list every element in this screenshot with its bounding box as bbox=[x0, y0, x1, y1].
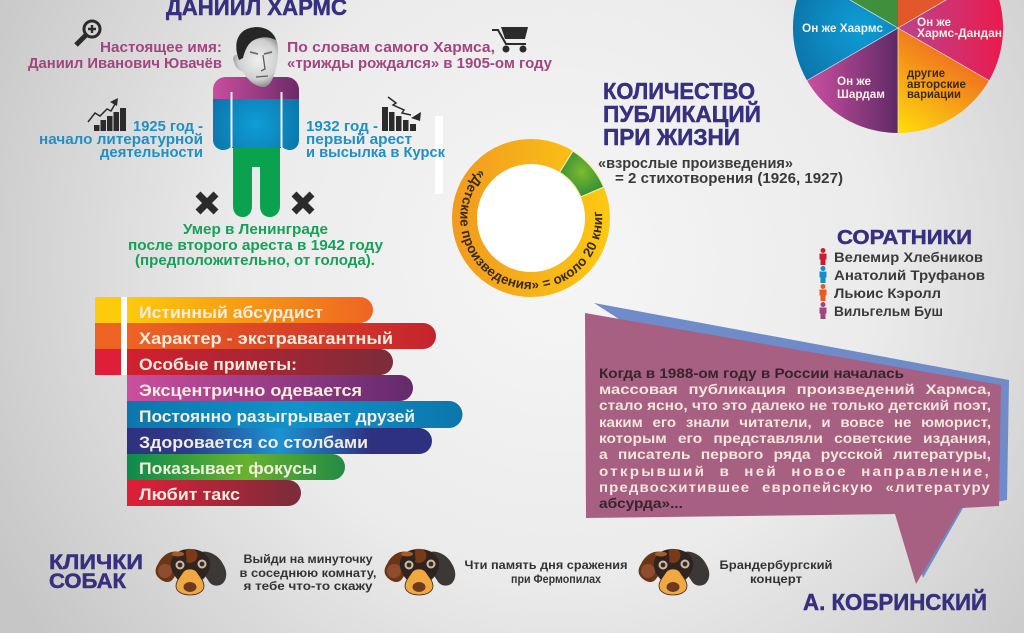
pie chart: pseudonyms bbox=[793, 0, 1003, 133]
real name text: Настоящее имя: bbox=[100, 40, 222, 56]
icon: dog 1 bbox=[156, 549, 226, 595]
dog name 3: концерт bbox=[750, 574, 802, 586]
trait bar 3: Особые приметы: bbox=[139, 356, 297, 374]
pie label: Шардам: Он же bbox=[837, 76, 871, 88]
death text: после второго ареста в 1942 году bbox=[128, 238, 383, 254]
1932 text: и высылка в Курск bbox=[306, 145, 446, 161]
trait bar 4: Эксцентрично одевается bbox=[139, 382, 362, 400]
panel: quote bubble bbox=[585, 303, 1009, 584]
pie label: Хармс-Дандан bbox=[917, 17, 1002, 40]
associate: Труфанов: Анатолий Труфанов bbox=[834, 268, 985, 283]
death text: (предположительно, от голода). bbox=[135, 253, 375, 269]
pie label: Хармс-Дандан: Он же bbox=[917, 17, 951, 29]
trait bar 1: Истинный абсурдист bbox=[139, 304, 323, 322]
pie label: Хармс-Дандан: Хармс-Дандан bbox=[917, 28, 1002, 40]
icon: dog 3 bbox=[639, 549, 709, 595]
quote text: открывший в ней новое направление, bbox=[599, 464, 991, 479]
dog name 1 bbox=[240, 554, 376, 593]
trait bar 5 bbox=[127, 401, 462, 428]
panel: associates bbox=[820, 226, 985, 319]
three births text: «трижды рождался» в 1905-ом году bbox=[287, 56, 552, 72]
quote text bbox=[599, 366, 991, 511]
trait bar 3 bbox=[127, 349, 393, 375]
1925 text: начало литературной bbox=[39, 132, 203, 148]
1925 text bbox=[39, 119, 203, 161]
quote text: а писатель первого ряда русской литературы, bbox=[599, 447, 991, 462]
pie label: Шардам bbox=[837, 76, 885, 101]
quote text: массовая публикация произведений Хармса, bbox=[599, 382, 991, 397]
dog name 3 bbox=[720, 560, 832, 586]
shoulders bbox=[213, 77, 299, 99]
pie label: variations: вариации bbox=[907, 89, 961, 101]
three births text bbox=[287, 40, 552, 72]
pie label: Хаармс: Он же Хаармс bbox=[802, 23, 884, 35]
1925 text: 1925 год - bbox=[133, 119, 203, 135]
real name text bbox=[28, 40, 222, 72]
donut chart: «Детские произведения» = около 20 книг bbox=[460, 171, 602, 290]
panel: traits list bbox=[95, 297, 462, 506]
quote text: каким его знали читатели, и вовсе не юморист, bbox=[599, 415, 991, 430]
legs bbox=[233, 147, 280, 217]
adult works text: «взрослые произведения» bbox=[598, 156, 793, 172]
dog name 1: в соседнюю комнату, bbox=[240, 568, 376, 580]
quote text: Когда в 1988-ом году в России началась bbox=[599, 366, 904, 381]
associate: Хлебников: Велемир Хлебников bbox=[834, 250, 983, 265]
1932 text bbox=[306, 119, 446, 161]
heading: dog names: СОБАК bbox=[49, 569, 127, 593]
associate: Буш: Вильгельм Буш bbox=[834, 304, 943, 319]
heading: publications: ПРИ ЖИЗНИ bbox=[603, 124, 740, 150]
trait bar 6: Здоровается со столбами bbox=[139, 434, 368, 452]
three births text: По словам самого Хармса, bbox=[287, 40, 495, 56]
dog name 2 bbox=[464, 560, 628, 586]
adult works text bbox=[598, 156, 843, 187]
dog name 3: Брандербургский bbox=[720, 560, 832, 572]
death text: Умер в Ленинграде bbox=[183, 222, 328, 238]
heading: publications bbox=[603, 78, 761, 150]
pie label: variations: авторские bbox=[907, 79, 966, 91]
heading: publications: ПУБЛИКАЦИЙ bbox=[603, 100, 761, 127]
heading: publications: КОЛИЧЕСТВО bbox=[603, 78, 755, 104]
1932 text: первый арест bbox=[306, 132, 412, 148]
trait bar 7 bbox=[127, 454, 345, 480]
icon: left cross bbox=[198, 194, 216, 212]
trait bar 2 bbox=[127, 323, 436, 349]
trait bar 7: Показывает фокусы bbox=[139, 460, 317, 478]
heading: dog names bbox=[49, 550, 143, 593]
pie label: variations: другие bbox=[907, 68, 945, 80]
death text bbox=[128, 222, 383, 269]
adult works text: = 2 стихотворения (1926, 1927) bbox=[615, 171, 843, 187]
trait bar 8 bbox=[127, 480, 301, 506]
real name text: Даниил Иванович Ювачёв bbox=[28, 56, 222, 72]
icon: dog 2 bbox=[385, 549, 455, 595]
heading: dog names: КЛИЧКИ bbox=[49, 550, 143, 574]
pie label: variations bbox=[907, 68, 966, 101]
heading: associates: СОРАТНИКИ bbox=[837, 226, 972, 249]
quote text: предвосхитившее европейскую «литературу bbox=[599, 480, 991, 495]
arm gaps bbox=[232, 92, 282, 147]
trait bar 4 bbox=[127, 375, 413, 401]
figure: body bbox=[213, 77, 299, 217]
icon: magnifier bbox=[76, 21, 100, 45]
portrait head bbox=[233, 27, 278, 87]
trait squares bbox=[95, 297, 121, 375]
trait bar 5: Постоянно разыгрывает друзей bbox=[139, 408, 415, 426]
quote text: которым его представляли советские издания, bbox=[599, 431, 991, 446]
trait bar 8: Любит такс bbox=[139, 486, 240, 504]
bubble shadow bbox=[594, 303, 1009, 578]
associate: Кэролл: Льюис Кэролл bbox=[834, 286, 941, 301]
dog name 2: Чти память дня сражения bbox=[464, 560, 628, 572]
white bar bbox=[435, 116, 443, 194]
trait bar 2: Характер - экстравагантный bbox=[139, 330, 393, 348]
1925 text: деятельности bbox=[100, 145, 203, 161]
icon: falling chart bbox=[382, 97, 421, 131]
quote author: А. КОБРИНСКИЙ bbox=[803, 588, 987, 615]
trait bar 6 bbox=[127, 428, 432, 454]
dog name 1: Выйди на минуточку bbox=[244, 554, 373, 566]
dog name 2: при Фермопилах bbox=[511, 574, 602, 586]
white divider bbox=[121, 297, 127, 375]
bubble body bbox=[585, 313, 1001, 584]
icon: shopping cart bbox=[492, 27, 528, 52]
quote text: стало ясно, что это далеко не только детский поэт, bbox=[599, 398, 991, 413]
quote text: абсурда»... bbox=[599, 496, 683, 511]
torso and arms bbox=[213, 99, 299, 150]
icon: rising chart bbox=[88, 98, 126, 131]
trait bar 1 bbox=[127, 297, 373, 323]
pie label: Шардам: Шардам bbox=[837, 89, 885, 101]
icon: right cross bbox=[294, 194, 312, 212]
1932 text: 1932 год - bbox=[306, 119, 378, 135]
dog name 1: я тебе что-то скажу bbox=[244, 581, 373, 593]
